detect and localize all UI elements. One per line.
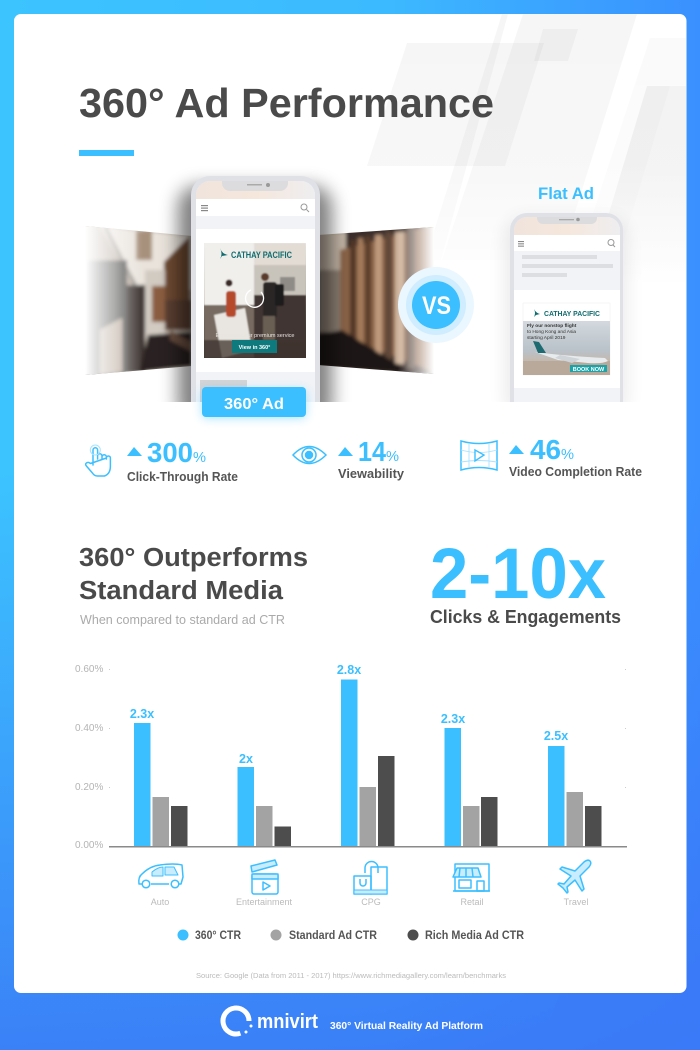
Cathay ad creative [204, 243, 306, 358]
entertainment bars [238, 752, 291, 847]
footer logo and tagline: mnivirt [257, 1011, 318, 1033]
flat Cathay ad creative: CATHAY PACIFIC [544, 309, 601, 318]
background angled shapes [367, 14, 686, 290]
stat: video completion rate [461, 434, 642, 479]
auto bars [130, 707, 188, 847]
footer logo and tagline [223, 1008, 483, 1034]
footer logo and tagline: 360° Virtual Reality Ad Platform [330, 1021, 483, 1032]
y axis labels: 0.00% [75, 840, 103, 851]
travel bars: 2.5x [544, 729, 568, 743]
up arrow [509, 445, 524, 454]
icon: eye [293, 446, 326, 464]
legend: 360° CTR [195, 930, 242, 942]
category icons and labels: Auto [151, 897, 169, 907]
retail bars [441, 712, 498, 847]
book now button: BOOK NOW [573, 367, 605, 373]
up arrow [127, 447, 142, 456]
stat: video completion rate: % [561, 446, 574, 463]
title accent bar [79, 150, 134, 156]
flat Cathay ad creative: Fly our nonstop flight [527, 323, 577, 329]
CPG bars: 2.8x [337, 663, 361, 677]
big stat: Clicks & Engagements [430, 606, 621, 627]
VS badge: VS [422, 292, 451, 320]
legend: Standard Ad CTR [289, 930, 378, 942]
section heading [79, 544, 308, 605]
left panorama photo [86, 226, 191, 375]
cathay logo: CATHAY PACIFIC [231, 250, 292, 260]
retail bars: 2.3x [441, 712, 465, 726]
icon: clapperboard [251, 860, 278, 894]
icon: hand pointer [86, 445, 110, 476]
right panorama photo [316, 225, 436, 375]
icon: airplane [558, 860, 591, 893]
y axis labels: 0.20% [75, 782, 103, 793]
flat Cathay ad creative: starting April 2019 [527, 335, 566, 341]
category icons and labels: CPG [361, 897, 381, 907]
VS badge [398, 267, 474, 343]
bar chart [75, 663, 627, 851]
section heading: 360° Outperforms [79, 544, 308, 572]
category icons and labels: Retail [460, 897, 484, 907]
plane [533, 341, 608, 363]
y axis labels: 0.40% [75, 723, 103, 734]
section subheading: When compared to standard ad CTR [80, 613, 285, 627]
section heading: Standard Media [79, 577, 284, 605]
stat: viewability: % [386, 448, 399, 465]
travel bars [544, 729, 602, 847]
legend: Rich Media Ad CTR [425, 930, 525, 942]
360 ad panorama and phone [80, 176, 436, 436]
Cathay ad creative: Experience our premium service [216, 333, 294, 339]
flat ad phone [504, 213, 628, 402]
stat: click-through rate [86, 437, 238, 484]
icon: shopping bags [354, 862, 387, 894]
entertainment bars: 2x [239, 752, 253, 766]
stat: video completion rate: Video Completion Rate [509, 465, 642, 479]
title: 360° Ad Performance [79, 80, 494, 126]
y axis labels: 0.60% [75, 664, 103, 675]
view in 360 button: View in 360° [239, 345, 270, 351]
category icons and labels: Entertainment [236, 897, 293, 907]
source note: Source: Google (Data from 2011 - 2017) https://www.richmediagallery.com/learn/benchmarks [196, 973, 507, 980]
flat ad heading: Flat Ad [538, 184, 594, 203]
icon: storefront [453, 864, 490, 891]
360 ad badge [202, 387, 306, 418]
stat: viewability: Viewability [338, 467, 404, 481]
category icons and labels [139, 860, 591, 907]
360 spinner [246, 290, 264, 307]
up arrow [338, 447, 353, 456]
flat Cathay ad creative: to Hong Kong and Asia [527, 329, 576, 335]
stat: viewability [293, 436, 404, 481]
flat Cathay ad creative [523, 303, 610, 375]
stat: viewability: 14 [358, 436, 386, 467]
CPG bars [337, 663, 394, 847]
stat: video completion rate: 46 [530, 434, 561, 465]
icon: omnivirt ring [223, 1008, 252, 1034]
360 phone [191, 176, 320, 402]
phone shadow [178, 186, 332, 426]
icon: car [139, 864, 183, 888]
360 ad badge: 360° Ad [224, 396, 284, 413]
auto bars: 2.3x [130, 707, 154, 721]
y axis labels [75, 664, 626, 851]
icon: curved video screen [461, 441, 497, 470]
legend [178, 930, 525, 942]
big stat: 2-10x [430, 535, 606, 614]
stat: click-through rate: Click-Through Rate [127, 470, 238, 484]
stat: click-through rate: 300 [147, 437, 193, 468]
stat: click-through rate: % [193, 449, 206, 466]
category icons and labels: Travel [564, 897, 588, 907]
